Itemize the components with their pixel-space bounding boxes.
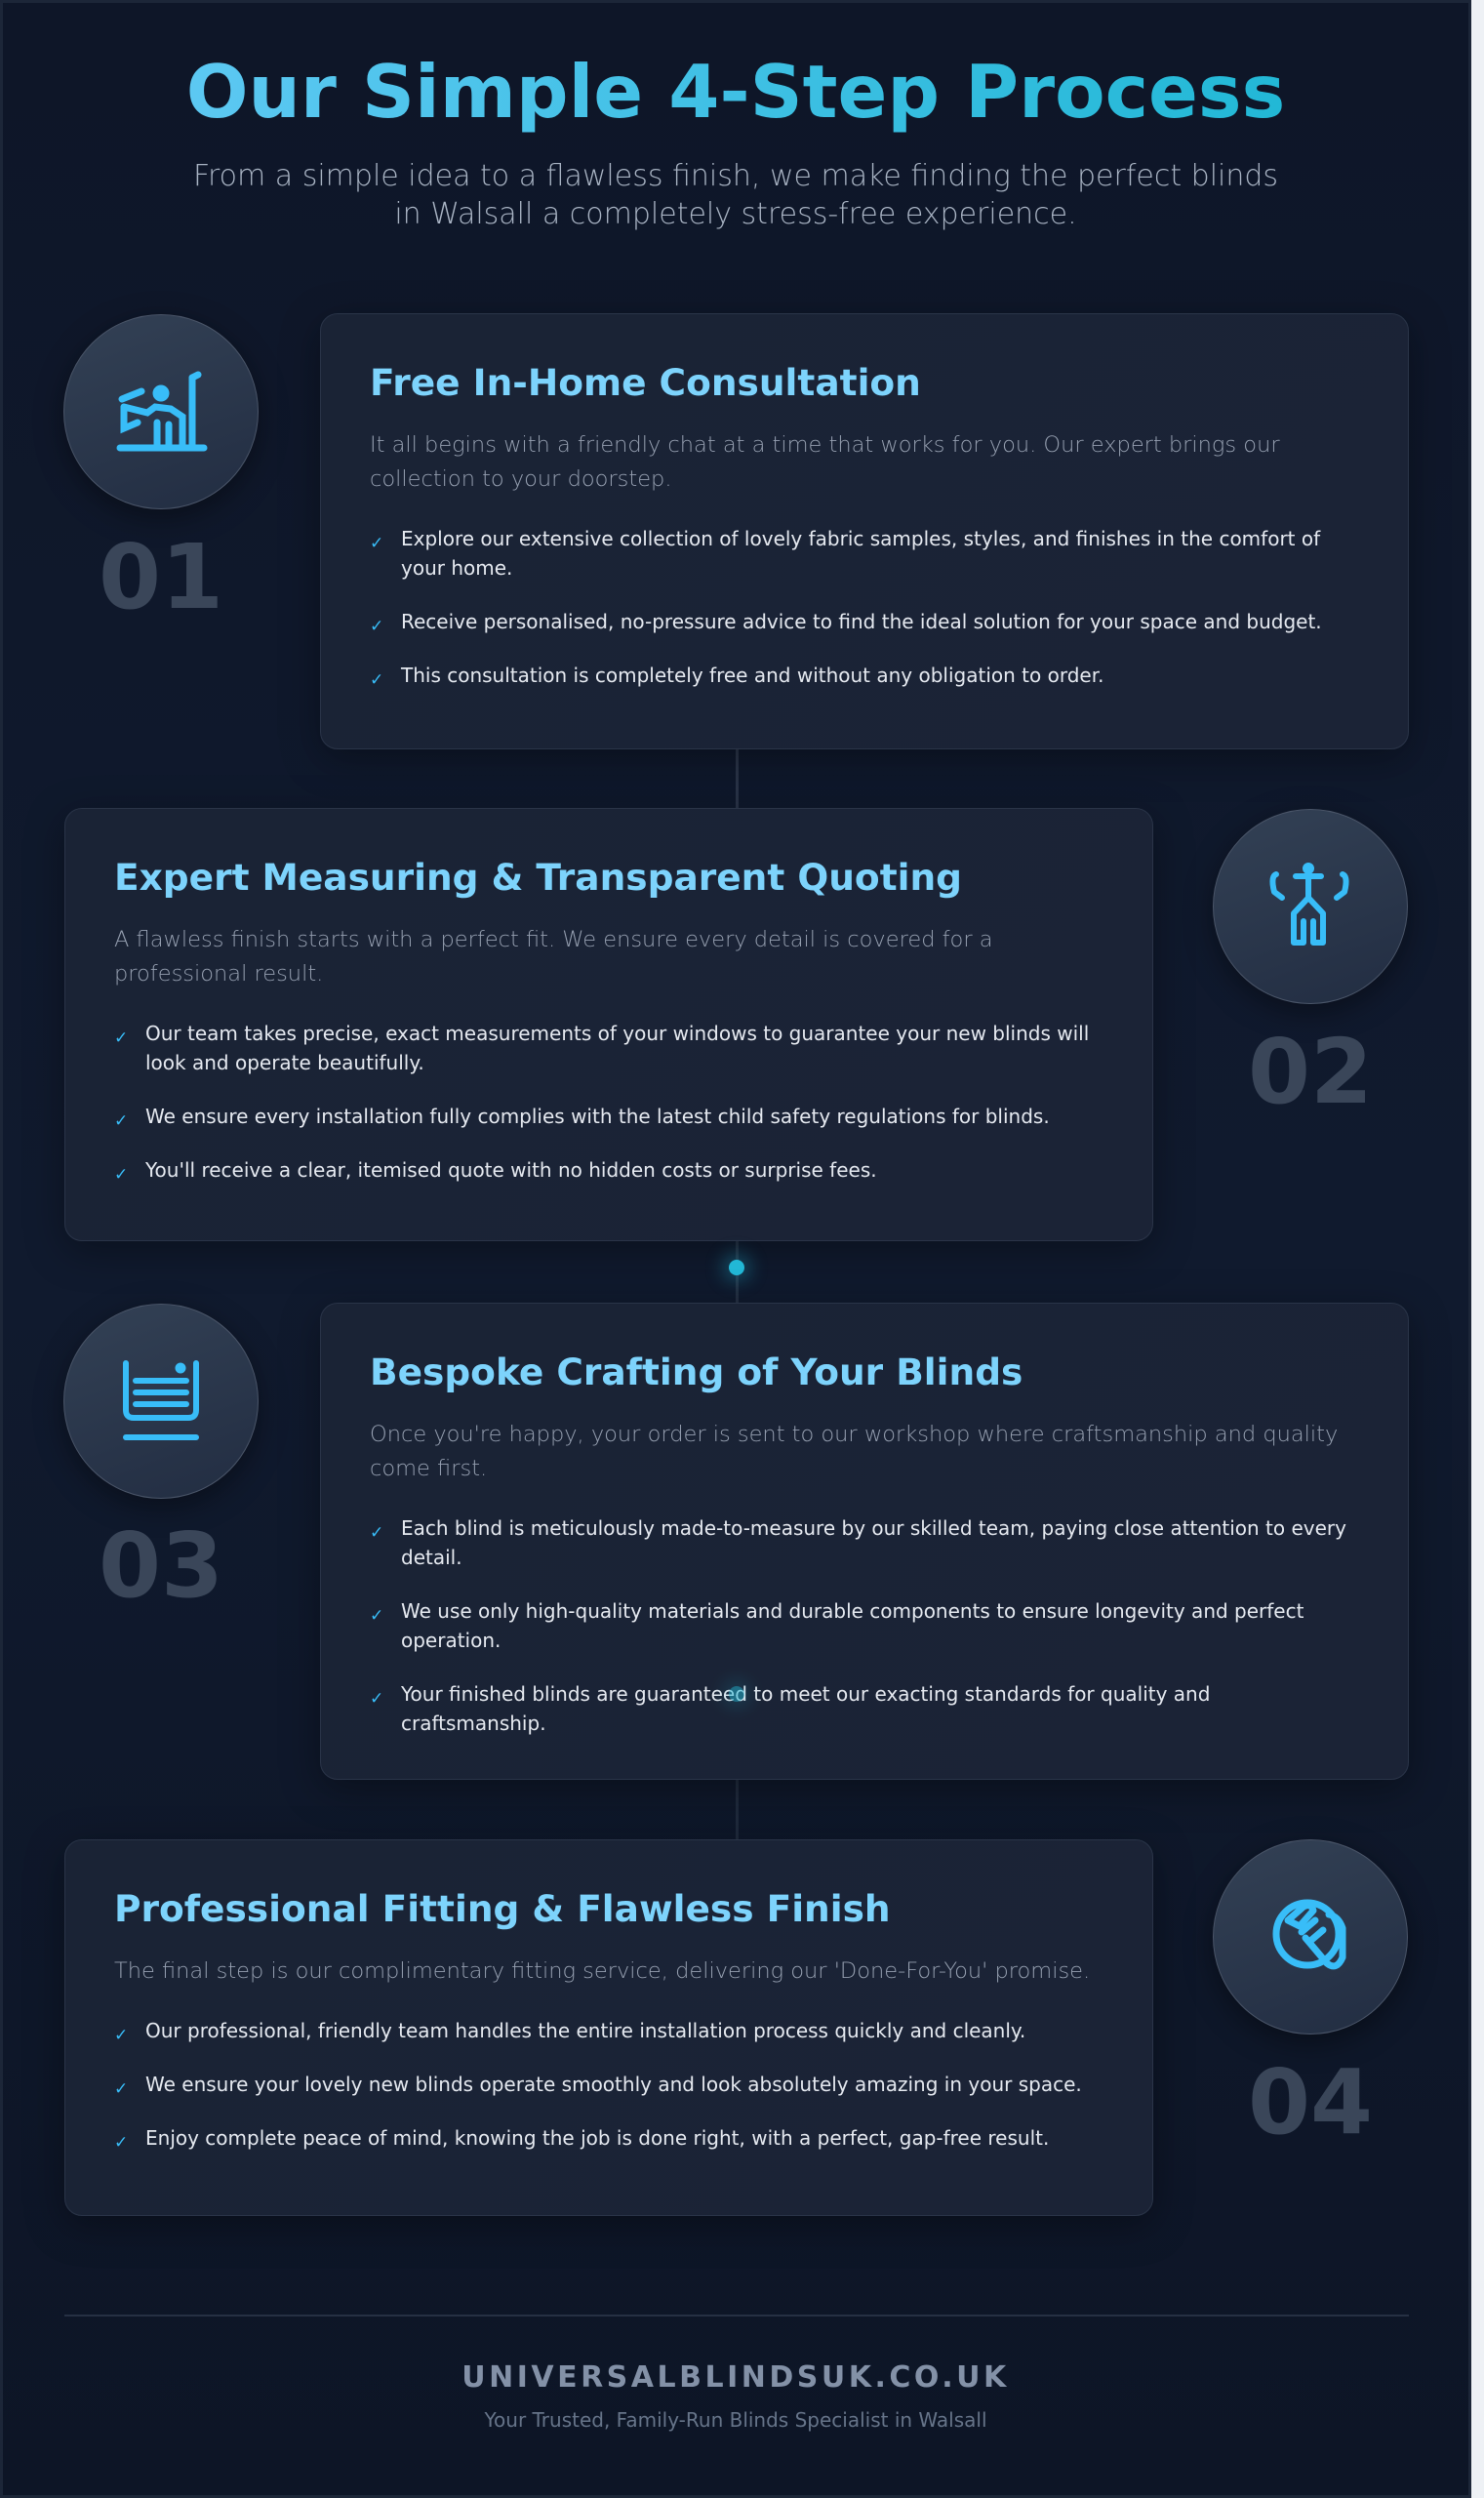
heading: Professional Fitting & Flawless Finish (114, 1887, 891, 1930)
bullets: Your finished blinds are guaranteed to meet our exacting standards for quality and craftsmanship. (401, 1682, 1210, 1735)
description: A flawless finish starts with a perfect fit. We ensure every detail is covered for a professional result. (114, 927, 993, 986)
glow dot 3 (729, 1686, 744, 1702)
step 2 icon circle (1213, 809, 1408, 1004)
description: It all begins with a friendly chat at a time that works for you. Our expert brings our collection to your doorstep. (370, 431, 1280, 492)
title: Our Simple 4-Step Process (186, 49, 1285, 135)
heading: Free In-Home Consultation (370, 361, 921, 404)
bullets: Our team takes precise, exact measurements of your windows to guarantee your new blinds will look and operate beautifully. (145, 1021, 1089, 1073)
step 3 number: 03 (99, 1513, 223, 1618)
bullets: You'll receive a clear, itemised quote with no hidden costs or surprise fees. (145, 1157, 877, 1181)
heading: Expert Measuring & Transparent Quoting (114, 856, 962, 899)
glow dot 2 (729, 1260, 744, 1275)
bullets: Enjoy complete peace of mind, knowing the job is done right, with a perfect, gap-free result. (145, 2125, 1049, 2149)
subtitle (193, 159, 1278, 231)
step 4 icon circle (1213, 1839, 1408, 2035)
bullets (373, 527, 1322, 687)
step 2 number: 02 (1248, 1020, 1373, 1124)
bullets: Each blind is meticulously made-to-measure by our skilled team, paying close attention to every detail. (401, 1516, 1346, 1569)
subtitle: in Walsall a completely stress-free experience. (394, 197, 1077, 231)
step 3 icon circle (63, 1304, 259, 1499)
bullets (117, 1021, 1089, 1181)
bullets: Our professional, friendly team handles the entire installation process quickly and cleanly. (145, 2018, 1025, 2041)
bullets: This consultation is completely free and without any obligation to order. (401, 664, 1103, 687)
step 1 icon circle (63, 314, 259, 509)
card 3 (320, 1303, 1409, 1780)
connector line (736, 745, 739, 1847)
footer tagline: Your Trusted, Family-Run Blinds Specialist in Walsall (484, 2408, 987, 2432)
card 2 (64, 808, 1153, 1241)
subtitle: From a simple idea to a flawless finish, we make finding the perfect blinds (193, 159, 1278, 193)
bullets: Receive personalised, no-pressure advice to find the ideal solution for your space and budget. (401, 609, 1322, 632)
bullets (117, 2018, 1082, 2149)
step 1 number: 01 (99, 525, 223, 629)
card 4 (64, 1839, 1153, 2216)
bullets: Explore our extensive collection of lovely fabric samples, styles, and finishes in the comfort of your home. (401, 527, 1320, 580)
footer divider (64, 2315, 1409, 2317)
step 4 number: 04 (1248, 2050, 1373, 2155)
card 1 (320, 313, 1409, 749)
description: The final step is our complimentary fitting service, delivering our 'Done-For-You' promise. (114, 1957, 1090, 1983)
glow dot 1 (729, 832, 744, 848)
bullets (373, 1516, 1346, 1735)
description: Once you're happy, your order is sent to our workshop where craftsmanship and quality come first. (370, 1421, 1338, 1481)
bullets: We use only high-quality materials and durable components to ensure longevity and perfect operation. (401, 1598, 1304, 1651)
heading: Bespoke Crafting of Your Blinds (370, 1350, 1023, 1393)
bullets: We ensure your lovely new blinds operate smoothly and look absolutely amazing in your space. (145, 2073, 1082, 2096)
footer url: UNIVERSALBLINDSUK.CO.UK (461, 2360, 1010, 2395)
bullets: We ensure every installation fully complies with the latest child safety regulations for blinds. (145, 1105, 1050, 1128)
